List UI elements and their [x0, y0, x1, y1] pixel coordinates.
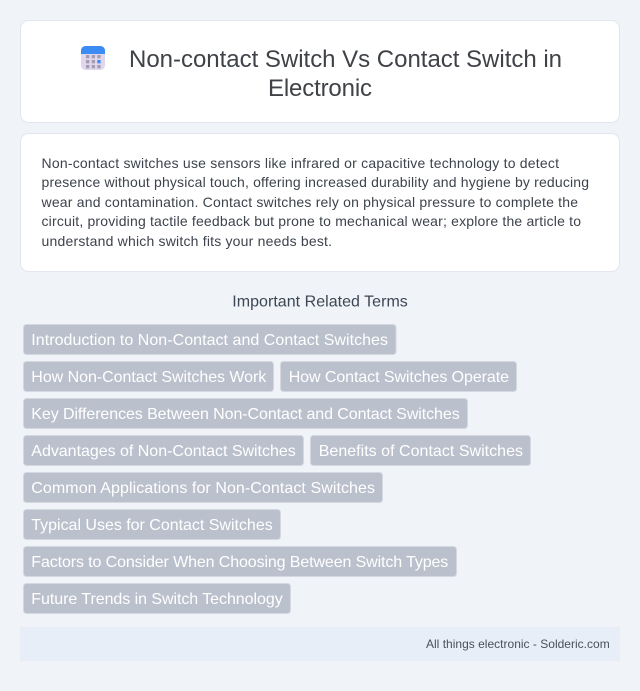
title: Electronic — [268, 75, 372, 102]
text block: description — [40, 155, 589, 249]
chip: future trends — [24, 584, 290, 614]
footer credit: All things electronic - Solderic.com — [426, 637, 610, 651]
chip: advantages: Advantages of Non-Contact Switches — [31, 443, 296, 460]
chip: introduction: Introduction to Non-Contact and Contact Switches — [31, 332, 388, 349]
title: Non-contact Switch Vs Contact Switch in — [129, 46, 562, 73]
chip: future trends: Future Trends in Switch Technology — [31, 591, 283, 608]
chip: how non-contact switches work — [24, 362, 274, 392]
chip: key differences: Key Differences Between Non-Contact and Contact Switches — [31, 406, 460, 423]
chip: factors: Factors to Consider When Choosing Between Switch Types — [31, 554, 448, 571]
chip: introduction — [24, 324, 396, 354]
chip: benefits — [310, 436, 530, 466]
panel: term chips — [24, 324, 530, 614]
icon: calendar — [81, 46, 105, 70]
title — [129, 46, 562, 102]
chip: factors — [24, 546, 456, 576]
footer — [20, 627, 620, 661]
chip: how contact switches operate: How Contact Switches Operate — [289, 369, 509, 386]
chip: benefits: Benefits of Contact Switches — [319, 443, 523, 460]
chip: advantages — [24, 436, 304, 466]
chip: common applications: Common Applications for Non-Contact Switches — [31, 480, 375, 497]
panel: title card — [20, 20, 620, 122]
text block: description: wear and contamination. Contact switches rely on physical pressure to complete the — [40, 194, 578, 210]
text block: description: presence without physical touch, offering increased durability and hygiene by reducing — [42, 174, 589, 190]
chip: how non-contact switches work: How Non-Contact Switches Work — [31, 369, 267, 386]
text block: description: understand which switch fits your needs best. — [42, 233, 332, 249]
chip: how contact switches operate — [280, 362, 516, 392]
chip: typical uses: Typical Uses for Contact Switches — [31, 517, 273, 534]
chip: typical uses — [24, 510, 280, 540]
chip: common applications — [24, 472, 382, 502]
chip: key differences — [24, 398, 468, 428]
panel: description card — [20, 134, 620, 272]
heading: important related terms: Important Related Terms — [232, 294, 408, 310]
text block: description: Non-contact switches use sensors like infrared or capacitive technology to detect — [42, 155, 559, 171]
text block: description: circuit, providing tactile feedback but prone to mechanical wear; explore the article to — [42, 213, 581, 229]
